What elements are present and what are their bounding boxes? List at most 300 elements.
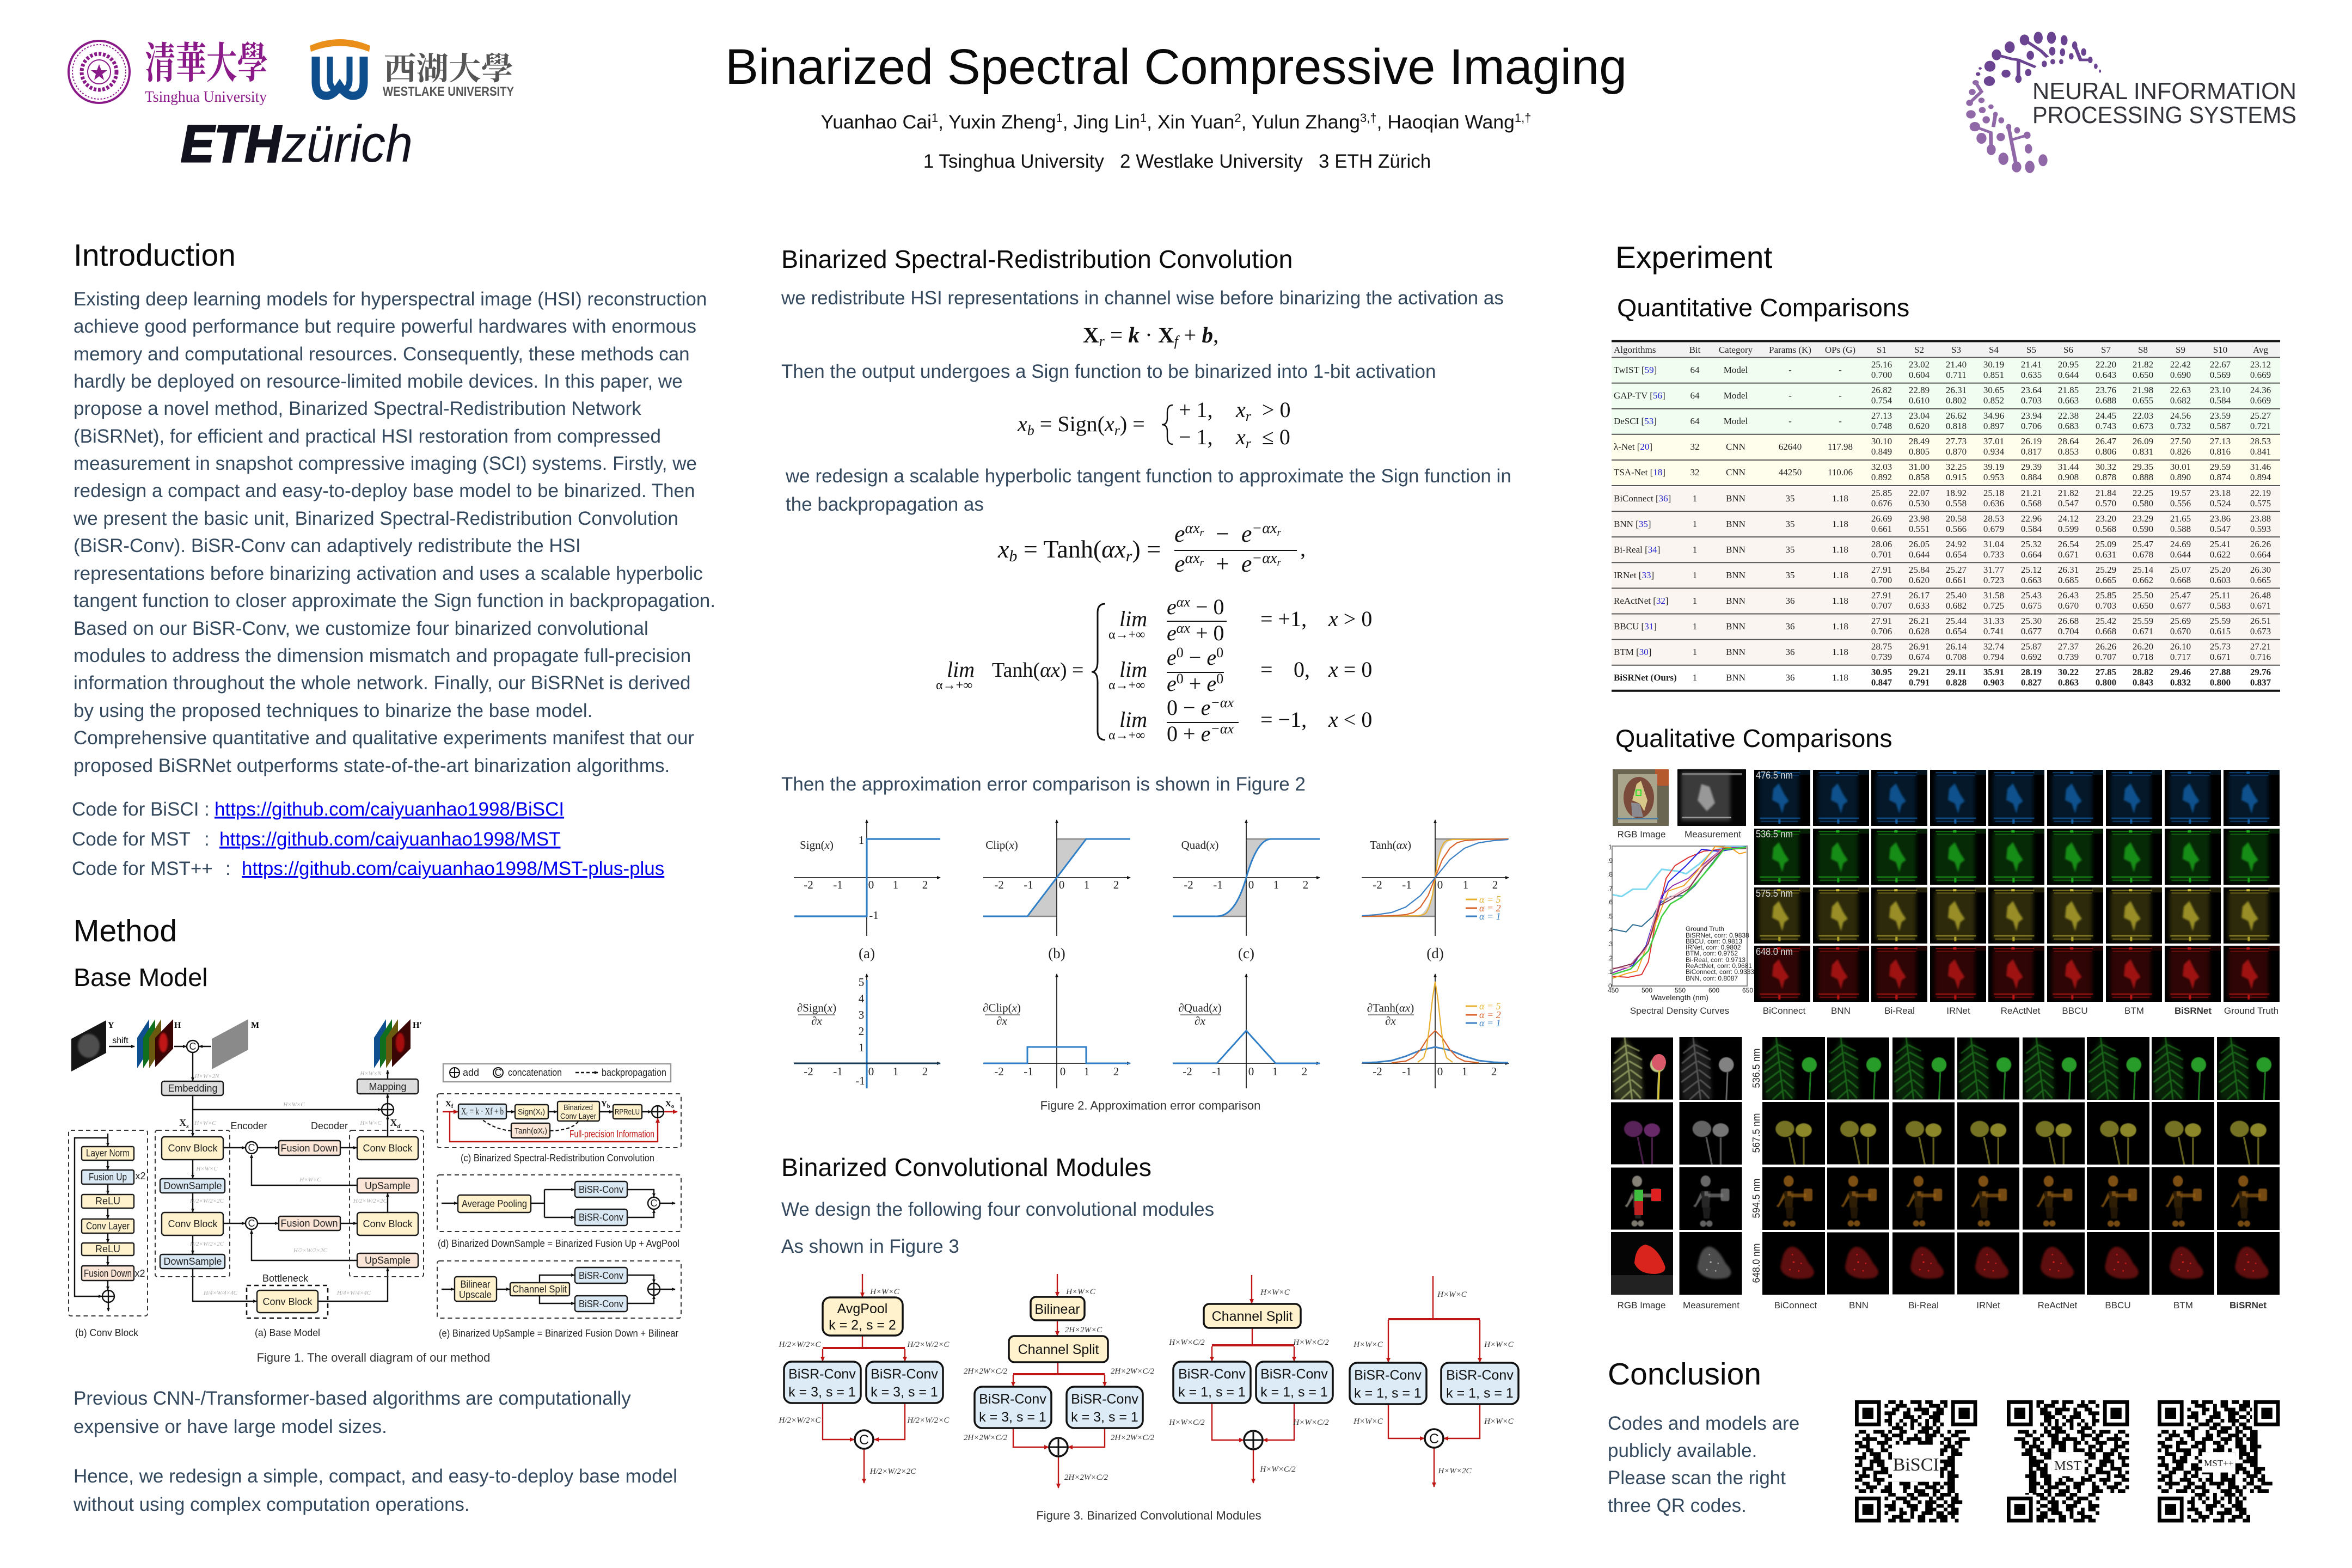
row: BiConnect: 0.547 <box>2058 498 2079 509</box>
axis tick labels: -1 <box>855 1074 865 1087</box>
row: TwIST: - <box>1839 365 1842 375</box>
authors: , Jing Lin <box>1063 111 1140 133</box>
panel letters: (c) <box>1238 945 1254 961</box>
row: DeSCI: 0.897 <box>1983 421 2005 431</box>
panel e: upsample: Upscale <box>459 1289 492 1300</box>
row: BNN: 0.599 <box>2058 524 2079 534</box>
axis tick labels: -1 <box>1024 878 1033 891</box>
row: GAP-TV: 0.852 <box>1983 395 2004 406</box>
row: Bi-Real: 0.701 <box>1871 549 1892 560</box>
row: Bi-Real: 26.26 <box>2250 539 2271 549</box>
row: TSA-Net: 0.888 <box>2133 472 2153 482</box>
QR code: MST++ <box>2156 1399 2283 1526</box>
heading: Quantitative Comparisons: Quantitative Comparisons <box>1617 293 1909 322</box>
row: DeSCI: 64 <box>1690 416 1700 426</box>
equation: limit: −αx <box>1210 695 1234 710</box>
row: TwIST: 0.604 <box>1909 370 1930 380</box>
output stack H': H′ <box>413 1021 422 1030</box>
equation: limit: 0 <box>1216 671 1223 687</box>
equation: Xr: k · X <box>1128 322 1174 347</box>
hyperspectral stack H: H <box>174 1021 181 1030</box>
row: TSA-Net <box>1614 462 2271 482</box>
QR code: MST++: MST++ <box>2204 1458 2233 1468</box>
authors: 1 <box>1140 111 1147 125</box>
row: DeSCI: 26.62 <box>1946 411 1967 421</box>
table header: S6 <box>2063 345 2073 355</box>
row: BNN: BNN [35] <box>1614 519 1651 529</box>
row: BiConnect: 25.18 <box>1983 488 2004 498</box>
row: BBCU: 0.673 <box>2250 626 2271 636</box>
text block: introduction body: tangent function to closer approximate the Sign function in backpropagation. <box>74 590 715 611</box>
row: IRNet: 25.27 <box>1946 565 1967 575</box>
row: TwIST: 0.650 <box>2133 370 2153 380</box>
row: Bi-Real: 0.644 <box>2170 549 2191 560</box>
base model labels: H×W×C <box>299 1177 321 1183</box>
row: BNN: 1 <box>1693 519 1697 529</box>
text block: introduction body: achieve good performance but require powerful hardwares with enormous <box>74 316 696 337</box>
row: GAP-TV: 22.63 <box>2170 385 2191 395</box>
row: DeSCI: 0.673 <box>2133 421 2153 431</box>
row: BNN: 20.58 <box>1946 513 1967 524</box>
row: TSA-Net: 29.35 <box>2133 462 2153 472</box>
QR code: MST: MST <box>2054 1459 2081 1473</box>
row: lambda-Net: 27.13 <box>2210 436 2231 446</box>
row: BNN: 0.547 <box>2210 524 2231 534</box>
figure 3: binarized convolutional modules <box>779 1274 1518 1488</box>
spectral density chart: Bi-Real, corr: 0.9713 <box>1686 956 1745 964</box>
text block: introduction body: modules to address the dimension mismatch and propagate full-precision <box>74 645 691 666</box>
text block: conclusion: Please scan the right <box>1608 1467 1786 1489</box>
row: BiConnect: 35 <box>1786 493 1794 504</box>
spectral density chart: .1 <box>1607 968 1613 976</box>
logo: Westlake University: 西湖大學 <box>384 43 513 89</box>
row: DeSCI: 0.683 <box>2058 421 2079 431</box>
table rules <box>1612 341 2280 691</box>
row: BiConnect: 0.570 <box>2096 498 2116 509</box>
spectral density chart: BiSRNet, corr: 0.9838 <box>1686 932 1749 939</box>
panel d: downsample: BiSR-Conv <box>579 1212 623 1223</box>
row: BNN: 0.551 <box>1909 524 1930 534</box>
row: Bi-Real: Bi-Real [34] <box>1614 544 1660 555</box>
row: BiConnect: BNN <box>1726 493 1745 504</box>
row: BBCU: BNN <box>1726 621 1745 632</box>
module 4: split concat: BiSR-Conv <box>1354 1368 1422 1383</box>
row: TSA-Net: 0.908 <box>2058 472 2079 482</box>
equation: sign <box>1017 397 1290 451</box>
module 3: split add: Channel Split <box>1212 1309 1293 1324</box>
row: TSA-Net: 29.39 <box>2021 462 2042 472</box>
row: BiConnect: 0.580 <box>2133 498 2153 509</box>
row: BiConnect: 0.676 <box>1871 498 1892 509</box>
row: BBCU: 25.59 <box>2133 616 2153 626</box>
sub-figure captions: (c) Binarized Spectral-Redistribution Convolution <box>461 1153 654 1163</box>
row: BBCU: 25.42 <box>2096 616 2116 626</box>
panel d: downsample <box>442 1181 675 1226</box>
row: TSA-Net: 0.890 <box>2170 472 2191 482</box>
row: TwIST: 23.12 <box>2250 359 2271 370</box>
row: Bi-Real: 26.05 <box>1909 539 1930 549</box>
equation: limit: = <box>1260 657 1273 682</box>
text: redistribute: we redistribute HSI representations in channel wise before binarizing the activation as <box>781 287 1504 309</box>
row: IRNet: 1.18 <box>1832 570 1848 580</box>
captions: Spectral Density Curves <box>1630 1006 1729 1016</box>
rotated wavelength labels: 536.5 nm <box>1751 1049 1762 1088</box>
spectral density chart: .7 <box>1607 885 1613 892</box>
row: Bi-Real: 0.664 <box>2250 549 2271 560</box>
row: BiSRNet: 36 <box>1786 672 1794 683</box>
row: ReActNet: 1 <box>1693 596 1697 606</box>
row: TwIST: 0.643 <box>2096 370 2116 380</box>
row: BNN: 23.29 <box>2133 513 2153 524</box>
row: BiSRNet: 29.11 <box>1946 667 1967 677</box>
decoder blocks <box>357 1137 418 1267</box>
row: BNN: 0.661 <box>1871 524 1892 534</box>
module 2: upsample: 2H×2W×C/2 <box>964 1434 1008 1442</box>
axis tick labels: 0 <box>1248 878 1254 891</box>
equation: limit: 0 <box>1177 645 1184 660</box>
panel c: spectral redistribution convolution: b <box>607 1104 610 1110</box>
row: BTM: 32.74 <box>1983 641 2005 652</box>
module 4: split concat <box>1350 1276 1518 1487</box>
equation: sign: x <box>1017 412 1027 436</box>
panel b: conv block: x2 <box>134 1268 145 1279</box>
row: lambda-Net: 28.53 <box>2250 436 2271 446</box>
row: BBCU: 0.654 <box>1946 626 1967 636</box>
module 2: upsample: 2H×2W×C/2 <box>1111 1434 1155 1442</box>
row: IRNet: 25.29 <box>2096 565 2116 575</box>
module 2: upsample: k = 3, s = 1 <box>1071 1410 1138 1425</box>
alpha legends <box>1466 894 1501 1028</box>
base model labels: H/2×W/2×2C <box>353 1198 388 1204</box>
row: BNN <box>1614 513 2271 534</box>
equation: tanh: = Tanh( <box>1017 535 1101 563</box>
equation: limit: e <box>1167 621 1177 645</box>
equation: tanh: −αx <box>1252 550 1277 567</box>
row: BTM: BNN <box>1726 647 1745 657</box>
row: TSA-Net: 32 <box>1690 467 1700 477</box>
table header: S7 <box>2101 345 2111 355</box>
code links: https://github.com/caiyuanhao1998/MST <box>219 829 560 850</box>
row: BiSRNet: 0.832 <box>2170 677 2191 688</box>
equation: limit: αx <box>1177 620 1190 636</box>
module 1: downsample: k = 3, s = 1 <box>788 1385 856 1400</box>
captions: Measurement <box>1683 1300 1739 1310</box>
row: ReActNet: 0.725 <box>1983 601 2004 611</box>
gray error areas <box>983 839 1509 916</box>
row: BiSRNet: BNN <box>1726 672 1745 683</box>
chart axes <box>794 820 1509 1088</box>
row: lambda-Net: 0.826 <box>2170 446 2191 457</box>
equation: limit: x > 0 <box>1328 607 1372 631</box>
block: Embedding: Embedding <box>168 1083 218 1094</box>
QR code: MST <box>2005 1399 2133 1526</box>
equation: limit: 0 <box>1216 645 1223 660</box>
code links: Code for MST <box>72 829 191 850</box>
table header: Bit <box>1689 345 1701 355</box>
row: Bi-Real: 0.678 <box>2133 549 2153 560</box>
row: ReActNet: 36 <box>1786 596 1794 606</box>
module 3: split add: H×W×C/2 <box>1168 1338 1205 1347</box>
row: DeSCI: 0.732 <box>2170 421 2191 431</box>
panel letters: (a) <box>859 945 875 961</box>
row: GAP-TV: 0.584 <box>2210 395 2231 406</box>
text: redesign <box>785 465 1511 515</box>
axis tick labels: 5 <box>859 976 864 989</box>
text block: introduction body: memory and computational resources. Consequently, these methods can <box>74 344 690 365</box>
axis tick labels: 1 <box>893 1065 898 1078</box>
decoder blocks: Conv Block <box>363 1218 413 1229</box>
row: GAP-TV: 21.98 <box>2133 385 2153 395</box>
axis tick labels: 1 <box>1463 878 1468 891</box>
row: IRNet: 0.663 <box>2021 575 2042 585</box>
row: BBCU: 26.21 <box>1909 616 1930 626</box>
equation: tanh <box>997 520 1306 577</box>
decoder blocks: UpSample <box>365 1180 411 1191</box>
equation: limit: 0 + e <box>1167 721 1210 746</box>
module 1: downsample: BiSR-Conv <box>871 1367 938 1382</box>
panel c: spectral redistribution convolution: Y <box>601 1100 607 1108</box>
table header: Avg <box>2253 345 2269 355</box>
row: BiConnect: BiConnect [36] <box>1614 493 1671 504</box>
row: BNN: 0.566 <box>1946 524 1967 534</box>
panel grid: 648.0 nm row <box>1754 946 2280 1002</box>
module 3: split add: BiSR-Conv <box>1260 1367 1328 1382</box>
wavelength labels <box>1756 770 1793 957</box>
row: TwIST: 22.67 <box>2210 359 2231 370</box>
row: BiSRNet: 0.828 <box>1946 677 1967 688</box>
axis tick labels: 0 <box>1437 878 1443 891</box>
fusion blocks <box>279 1141 340 1230</box>
row: BTM: 26.20 <box>2133 641 2153 652</box>
row: IRNet: 25.84 <box>1909 565 1930 575</box>
row: BBCU: 36 <box>1786 621 1794 632</box>
row: DeSCI: DeSCI [53] <box>1614 416 1657 426</box>
row: TSA-Net: 31.00 <box>1909 462 1930 472</box>
axis tick labels: 0 <box>1059 878 1064 891</box>
row: BNN: 23.86 <box>2210 513 2231 524</box>
hyperspectral stack H <box>137 1019 181 1068</box>
row: IRNet: 0.668 <box>2170 575 2191 585</box>
row: BiConnect: 1 <box>1693 493 1697 504</box>
row: BBCU: 0.741 <box>1983 626 2004 636</box>
row: BBCU: BBCU [31] <box>1614 621 1657 632</box>
logo: ETH Zurich: zürich <box>281 115 413 173</box>
row: IRNet: 0.685 <box>2058 575 2079 585</box>
row: BTM: 26.14 <box>1946 641 1967 652</box>
row: BiSRNet: 0.800 <box>2210 677 2231 688</box>
row: lambda-Net: 0.841 <box>2250 446 2271 457</box>
authors: Yuanhao Cai <box>821 111 932 133</box>
module 4: split concat: H×W×C <box>1484 1340 1514 1349</box>
table header <box>1614 345 2269 355</box>
equation: limit: = +1, <box>1260 607 1307 631</box>
row: GAP-TV: Model <box>1724 390 1748 401</box>
row: BBCU: 1 <box>1693 621 1697 632</box>
equation: limit: αx <box>1177 594 1190 610</box>
spectral density chart: BBCU, corr: 0.9813 <box>1686 938 1742 945</box>
authors: 2 <box>1234 111 1241 125</box>
table header: Category <box>1719 345 1753 355</box>
row: BNN: 0.590 <box>2133 524 2153 534</box>
row: IRNet: 0.620 <box>1909 575 1930 585</box>
row: GAP-TV: 23.10 <box>2210 385 2231 395</box>
row: IRNet: 25.20 <box>2210 565 2231 575</box>
authors: 1,† <box>1515 111 1531 125</box>
caption: figure 1: Figure 1. The overall diagram of our method <box>257 1351 490 1364</box>
sub-figure captions: (a) Base Model <box>255 1327 320 1338</box>
table header: S8 <box>2138 345 2148 355</box>
row: Bi-Real: 25.32 <box>2021 539 2042 549</box>
heading: Base Model: Base Model <box>74 963 208 991</box>
axis tick labels: 0 <box>1437 1065 1443 1078</box>
text block: introduction body: we present the basic unit, Binarized Spectral-Redistribution Convolution <box>73 508 678 529</box>
row: BTM: 0.707 <box>2096 652 2117 662</box>
equation: tanh: r <box>1200 527 1204 538</box>
row: DeSCI: 23.04 <box>1909 411 1930 421</box>
equation: limit: − <box>1184 645 1206 670</box>
text block: introduction body: Based on our BiSR-Conv, we customize four binarized convolutional <box>74 618 648 639</box>
text block: introduction body: (BiSR-Conv). BiSR-Conv can adaptively redistribute the HSI <box>74 535 581 556</box>
row: BiSRNet: 0.791 <box>1909 677 1930 688</box>
row: IRNet: 26.31 <box>2058 565 2079 575</box>
module 3: split add: BiSR-Conv <box>1178 1367 1246 1382</box>
row: TSA-Net: 0.953 <box>1983 472 2004 482</box>
equation: tanh: αx <box>1185 550 1200 567</box>
axis tick labels: 3 <box>859 1008 864 1021</box>
row: lambda-Net: 0.816 <box>2210 446 2231 457</box>
equation: tanh: b <box>1009 547 1017 565</box>
equation: tanh: − <box>1204 520 1241 547</box>
captions: BBCU <box>2105 1300 2131 1310</box>
axis tick labels: 2 <box>1113 878 1119 891</box>
row: Bi-Real: 26.54 <box>2058 539 2079 549</box>
row: GAP-TV: 0.669 <box>2250 395 2271 406</box>
equation: Xr: b, <box>1202 322 1218 347</box>
text block: introduction body: redesign a compact and easy-to-deploy base model to be binarized. Then <box>74 480 695 501</box>
captions: BiSRNet <box>2230 1300 2267 1310</box>
base model arrows <box>109 1046 388 1301</box>
equation: limit: 0, <box>1294 657 1310 682</box>
QR code: BiSCI <box>1853 1399 1981 1526</box>
spectral density chart: 1 <box>1608 843 1612 851</box>
row: ReActNet: 0.703 <box>2096 601 2116 611</box>
text block: conclusion: Codes and models are <box>1608 1413 1799 1434</box>
qualitative figure A: can scene <box>1607 769 2280 1016</box>
logo: ETH Zurich: ETH <box>181 115 282 173</box>
row: BiConnect: 0.568 <box>2021 498 2042 509</box>
spectral density chart: 500 <box>1641 987 1652 994</box>
row: BiSRNet <box>1614 667 2271 688</box>
row: TwIST: - <box>1788 365 1792 375</box>
module 1: downsample: C <box>859 1432 869 1448</box>
row: BNN: 22.96 <box>2021 513 2042 524</box>
row: IRNet <box>1614 565 2271 585</box>
function labels: Clip(x) <box>985 838 1018 852</box>
axis tick labels: 2 <box>859 1025 864 1038</box>
captions: Bi-Real <box>1908 1300 1939 1310</box>
sub-figure captions: (b) Conv Block <box>75 1327 139 1338</box>
row: BBCU: 31.33 <box>1983 616 2004 626</box>
equation: limit: e <box>1167 595 1177 619</box>
panel e: upsample <box>442 1267 675 1312</box>
row: lambda-Net: 26.47 <box>2096 436 2117 446</box>
captions: BNN <box>1831 1006 1851 1016</box>
row: TwIST: 0.569 <box>2210 370 2231 380</box>
toy row <box>1762 1167 2280 1230</box>
function labels: ∂x <box>811 1014 823 1027</box>
output stack H' <box>374 1019 422 1068</box>
row: TwIST: 23.02 <box>1909 359 1930 370</box>
row: lambda-Net: 0.849 <box>1871 446 1892 457</box>
panel b: conv block: Fusion Up <box>89 1172 127 1183</box>
row: DeSCI: 0.748 <box>1871 421 1892 431</box>
equation: sign: b <box>1027 422 1034 438</box>
row: lambda-Net <box>1614 436 2271 457</box>
equation: tanh: αx <box>1185 520 1200 537</box>
equation: limit: lim <box>1119 607 1147 631</box>
equation: tanh: r <box>1277 527 1281 538</box>
row: IRNet: 31.77 <box>1983 565 2005 575</box>
captions: IRNet <box>1946 1006 1970 1016</box>
row: TSA-Net: 0.884 <box>2021 472 2042 482</box>
row: Bi-Real: 25.47 <box>2133 539 2154 549</box>
module 2: upsample: BiSR-Conv <box>1071 1392 1138 1407</box>
dashed group frames <box>69 1094 681 1318</box>
row: BiSRNet: 35.91 <box>1983 667 2004 677</box>
row: lambda-Net: 0.831 <box>2133 446 2153 457</box>
spectral density chart: .3 <box>1607 940 1613 948</box>
equation: tanh: e <box>1174 550 1185 577</box>
row: ReActNet: 25.40 <box>1946 590 1967 601</box>
text block: base model discussion: expensive or have large model sizes. <box>74 1416 387 1437</box>
module 2: upsample <box>964 1274 1155 1488</box>
row: GAP-TV: 22.89 <box>1909 385 1930 395</box>
sub-figure captions: (e) Binarized UpSample = Binarized Fusion Down + Bilinear <box>439 1328 678 1339</box>
row: BTM: 26.26 <box>2096 641 2116 652</box>
table header: Params (K) <box>1769 345 1811 355</box>
row: GAP-TV: 0.802 <box>1946 395 1967 406</box>
row: BNN: 0.679 <box>1983 524 2004 534</box>
operator letters: C <box>248 1218 255 1229</box>
encoder blocks: Conv Block <box>168 1218 218 1229</box>
block: Mapping: Mapping <box>369 1081 407 1092</box>
row: BiConnect: 0.558 <box>1946 498 1967 509</box>
equation: limit: lim <box>947 657 975 682</box>
panel c: spectral redistribution convolution: Full-precision Information <box>569 1129 654 1140</box>
row: BiConnect: 22.07 <box>1909 488 1930 498</box>
spectral density chart: 0 <box>1608 982 1612 990</box>
row: TwIST: 0.644 <box>2058 370 2079 380</box>
row: GAP-TV: 23.76 <box>2096 385 2116 395</box>
row: ReActNet: 31.58 <box>1983 590 2004 601</box>
axis tick labels: 1 <box>859 1041 864 1054</box>
spectral density chart: BiConnect, corr: 0.9333 <box>1686 968 1754 976</box>
row: BTM <box>1614 641 2271 662</box>
function labels: ∂Quad(x) <box>1178 1001 1222 1014</box>
row: BiConnect: 0.530 <box>1909 498 1930 509</box>
axis tick labels: 1 <box>1084 1065 1089 1078</box>
row: BTM: BTM [30] <box>1614 647 1651 657</box>
table header: S10 <box>2213 345 2227 355</box>
row: GAP-TV: 26.31 <box>1946 385 1967 395</box>
row: BNN: 23.98 <box>1909 513 1930 524</box>
fusion blocks: Fusion Down <box>280 1218 338 1229</box>
module 3: split add: H×W×C/2 <box>1293 1418 1329 1427</box>
text block: introduction body: by using the proposed techniques to binarize the base model. <box>74 700 592 721</box>
panel b: conv block <box>75 1134 146 1311</box>
text block: conclusion <box>1608 1413 1799 1516</box>
equation: limit: = −1, <box>1260 707 1307 732</box>
